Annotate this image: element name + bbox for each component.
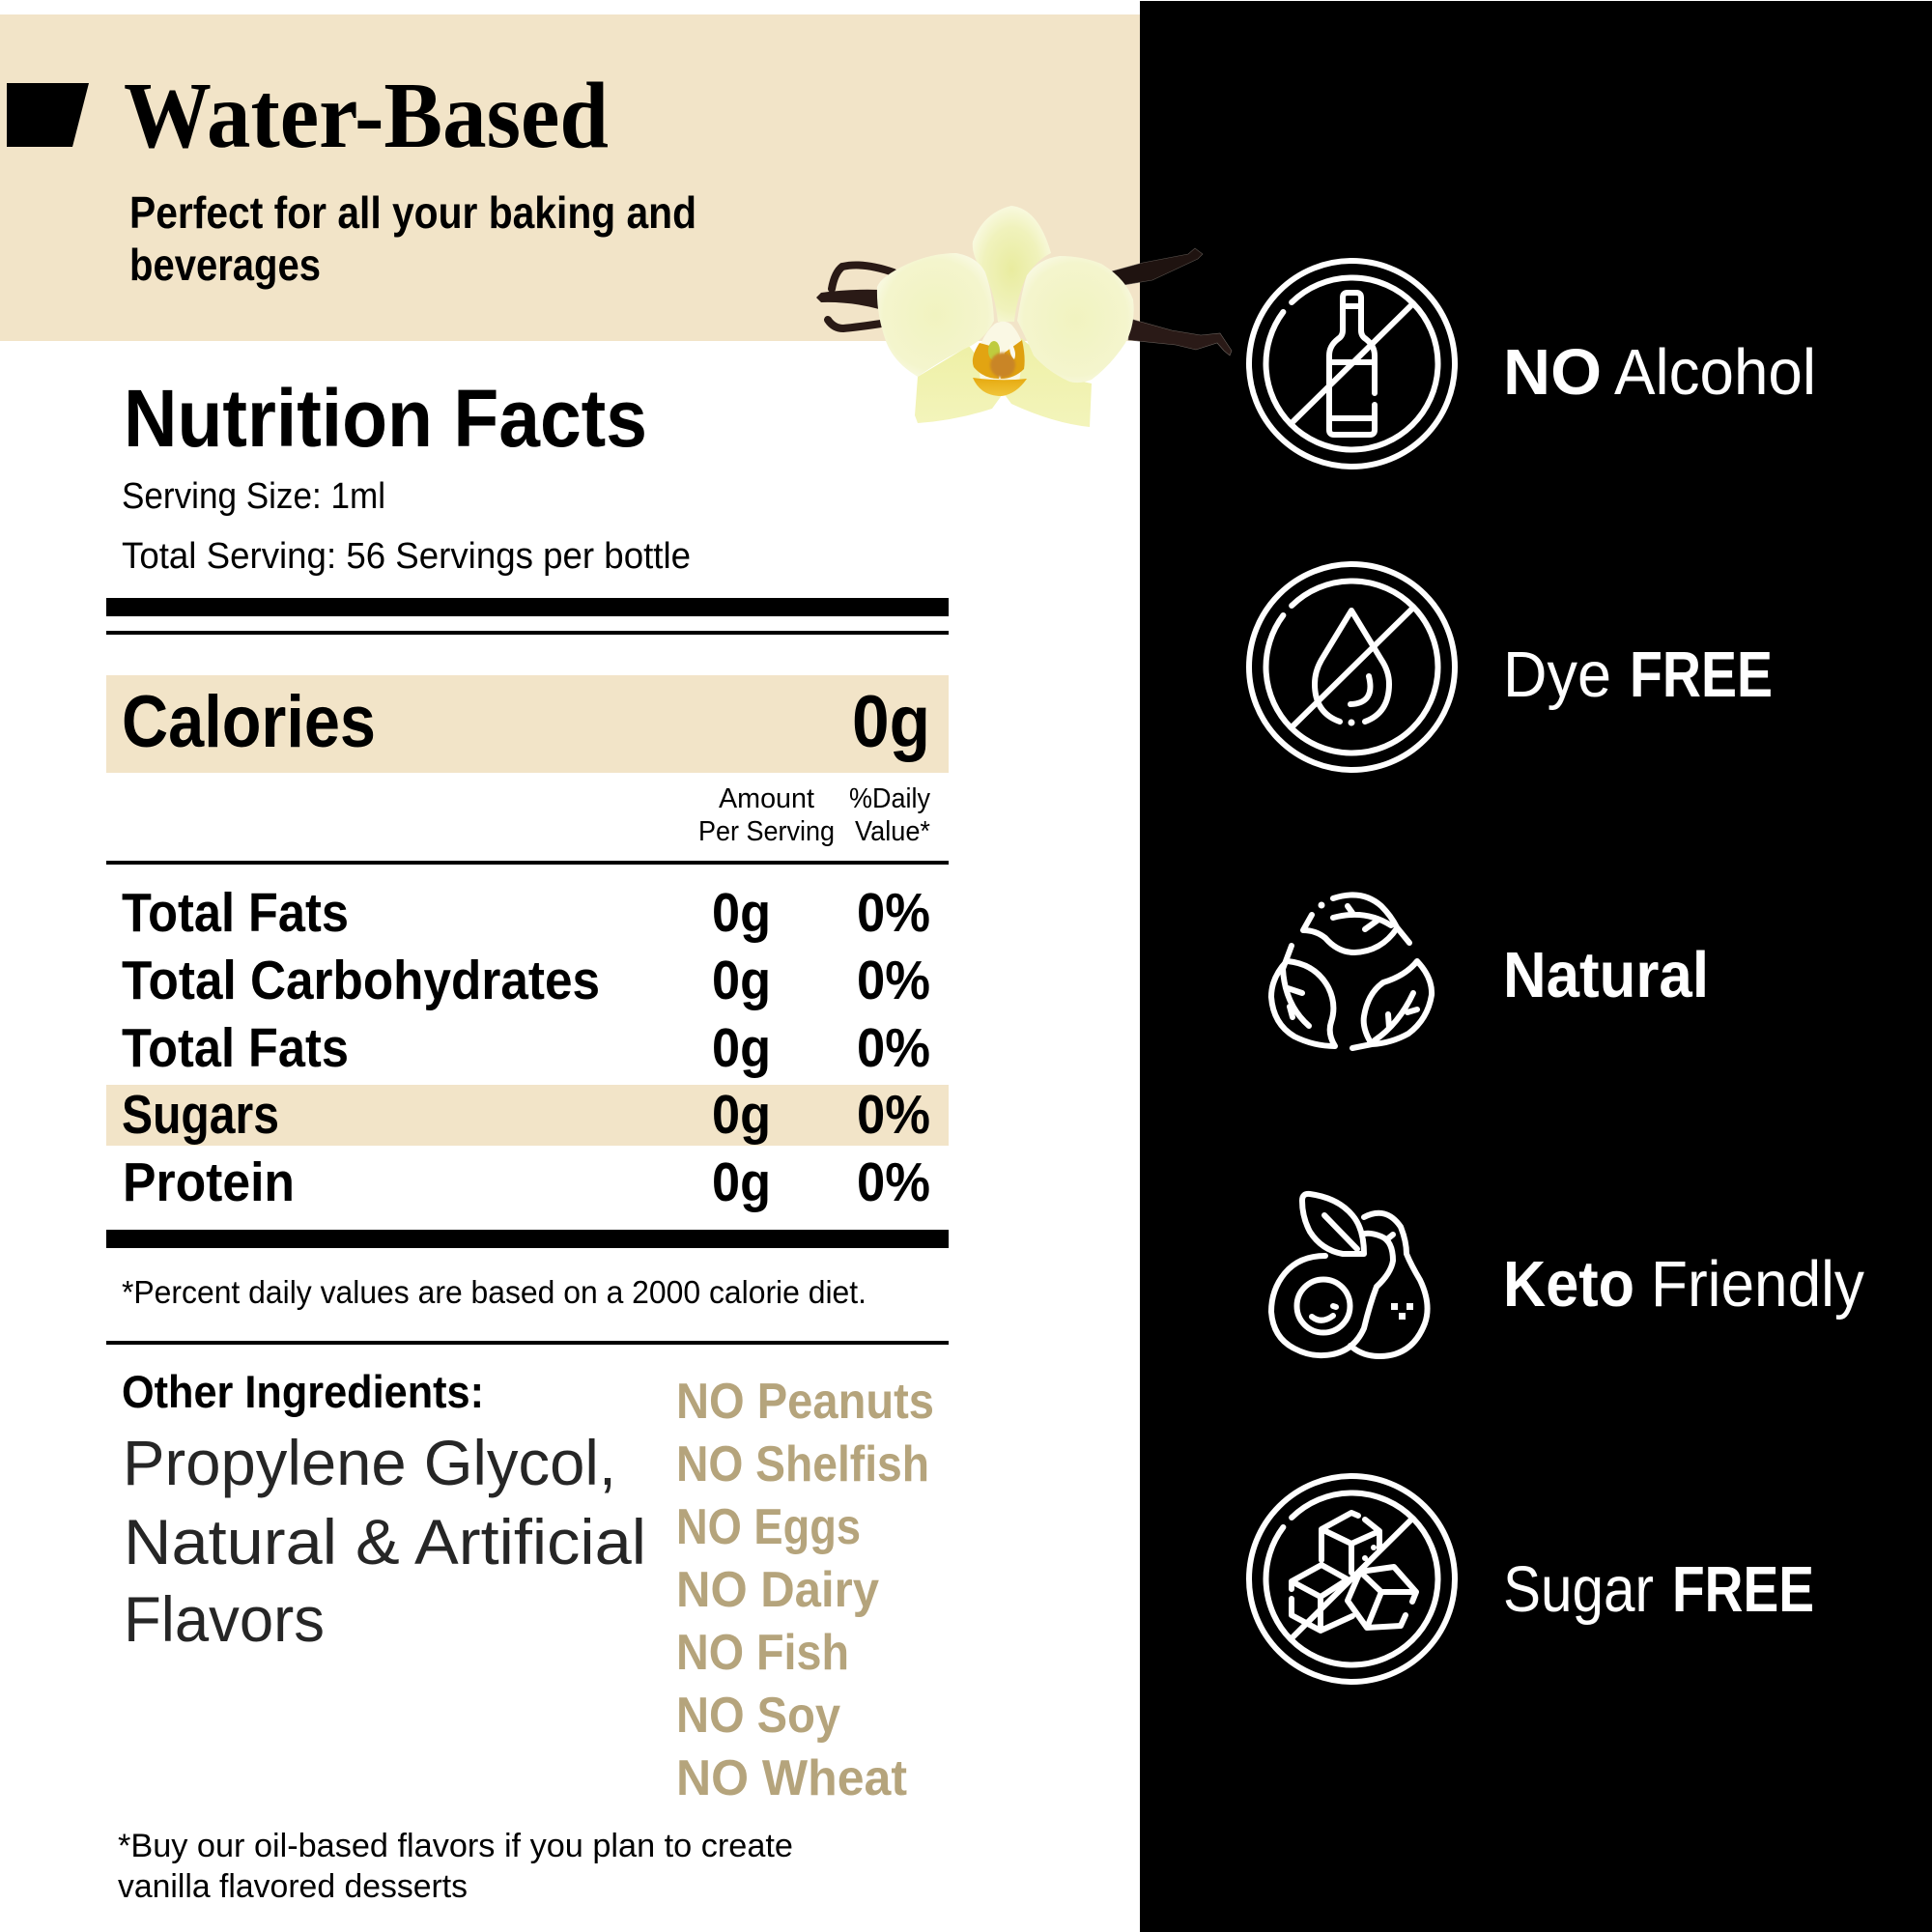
subtitle: Perfect for all your baking and — [129, 187, 696, 238]
vanilla flower with beans — [816, 206, 1232, 427]
other ingredients: Other Ingredients: — [122, 1366, 484, 1417]
column headers — [698, 783, 930, 847]
label: dye free: Dye — [1503, 639, 1611, 711]
allergen free list: NO Soy — [676, 1688, 840, 1744]
row: total fats second — [122, 1017, 930, 1079]
calories row: Calories — [122, 681, 376, 763]
dorsal sepal — [973, 206, 1051, 322]
row: total fats: Total Fats — [122, 882, 349, 944]
row: sugars: Sugars — [122, 1084, 279, 1146]
left petal — [877, 253, 994, 377]
serving info — [122, 476, 691, 577]
row: total fats: 0% — [857, 882, 930, 944]
label: natural: Natural — [1503, 939, 1709, 1011]
label: sugar free: Sugar — [1503, 1553, 1654, 1626]
label: keto friendly: Friendly — [1651, 1248, 1864, 1321]
icon: sugar free — [1231, 1458, 1473, 1700]
row: sugars — [106, 1084, 949, 1146]
row: sugars: 0% — [857, 1084, 930, 1146]
column headers: Per Serving — [698, 816, 835, 847]
label: no alcohol — [1503, 336, 1816, 409]
row: total fats second: 0% — [857, 1017, 930, 1079]
lower sepals — [915, 346, 1005, 423]
allergen free list: NO Peanuts — [676, 1374, 934, 1430]
column headers: %Daily — [849, 783, 930, 814]
row: total fats: 0g — [712, 882, 771, 944]
allergen free list: NO Fish — [676, 1625, 849, 1681]
label: sugar free: FREE — [1672, 1553, 1814, 1626]
label: sugar free — [1503, 1553, 1814, 1626]
calories row — [106, 675, 949, 773]
bottom note: *Buy our oil-based flavors if you plan to create — [118, 1828, 793, 1864]
row: total carbohydrates: Total Carbohydrates — [122, 950, 600, 1011]
row: total fats second: Total Fats — [122, 1017, 349, 1079]
icon: trapezoid marker — [7, 83, 89, 147]
subtitle: beverages — [129, 240, 321, 290]
heading: nutrition facts: Nutrition Facts — [124, 373, 647, 464]
row: protein: Protein — [123, 1151, 295, 1213]
label: no alcohol: Alcohol — [1614, 336, 1816, 409]
label: keto friendly: Keto — [1503, 1248, 1634, 1321]
calories row: 0g — [852, 681, 930, 763]
flower lip — [973, 322, 1027, 396]
label: keto friendly — [1503, 1248, 1864, 1321]
header band — [0, 14, 1140, 341]
black side panel — [1140, 1, 1932, 1932]
other ingredients — [122, 1366, 646, 1655]
nutrient table — [106, 882, 949, 1213]
other ingredients: Natural & Artificial — [124, 1506, 646, 1577]
row: protein — [123, 1151, 930, 1213]
icon: no alcohol — [1231, 242, 1473, 485]
allergen free list: NO Eggs — [676, 1499, 861, 1555]
vanilla beans — [816, 248, 1232, 355]
row: total fats — [122, 882, 930, 944]
row: total carbohydrates: 0% — [857, 950, 930, 1011]
bottom note: vanilla flavored desserts — [118, 1868, 468, 1905]
column headers: Value* — [855, 816, 930, 847]
allergen free list: NO Shelfish — [676, 1436, 929, 1492]
icon: keto avocado — [1271, 1194, 1428, 1356]
row: total carbohydrates: 0g — [712, 950, 771, 1011]
serving info: Total Serving: 56 Servings per bottle — [122, 536, 691, 577]
icon: dye free — [1231, 546, 1473, 788]
allergen free list: NO Dairy — [676, 1562, 879, 1618]
title: Water-Based — [124, 64, 609, 168]
daily value footnote: *Percent daily values are based on a 2000 calorie diet. — [122, 1274, 867, 1310]
row: sugars: 0g — [712, 1084, 771, 1146]
subtitle — [129, 187, 696, 290]
allergen free list: NO Wheat — [676, 1750, 907, 1806]
column headers: Amount — [719, 783, 814, 814]
row: total carbohydrates — [122, 950, 930, 1011]
label: dye free — [1503, 639, 1773, 711]
serving info: Serving Size: 1ml — [122, 476, 385, 517]
other ingredients: Propylene Glycol, — [123, 1427, 616, 1498]
row: protein: 0g — [712, 1151, 771, 1213]
right petal — [1017, 256, 1134, 383]
label: no alcohol: NO — [1503, 336, 1602, 409]
row: protein: 0% — [857, 1151, 930, 1213]
row: total fats second: 0g — [712, 1017, 771, 1079]
other ingredients: Flavors — [124, 1583, 325, 1655]
allergen free list — [676, 1374, 934, 1806]
icon: natural leaves — [1271, 895, 1432, 1048]
label: dye free: FREE — [1630, 639, 1773, 711]
bottom note — [118, 1828, 793, 1905]
